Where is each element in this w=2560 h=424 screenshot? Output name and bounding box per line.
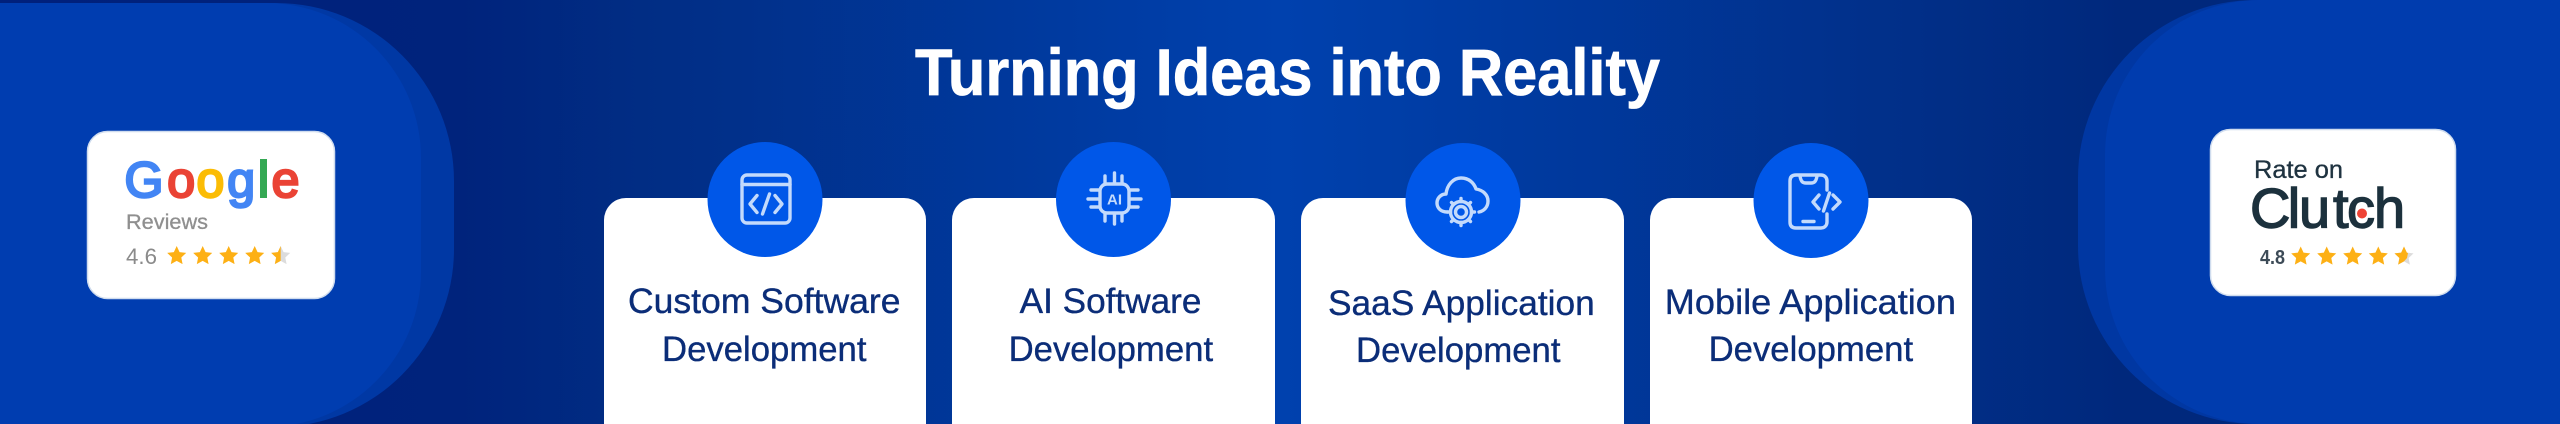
Clutch logo	[2250, 176, 2405, 240]
Reviews label: Reviews	[126, 211, 208, 234]
rating value 4.6: 4.6	[126, 244, 157, 269]
Google logo: o	[196, 152, 224, 208]
Google logo: g	[227, 152, 255, 208]
icon: AI chip: AI	[1107, 192, 1122, 208]
card heading: AI Software	[1020, 282, 1201, 321]
title: Turning Ideas into Reality	[915, 35, 1660, 109]
panel: Clutch rating badge	[2210, 130, 2456, 296]
Clutch logo: t	[2333, 176, 2349, 240]
panel: SaaS Application Development	[1301, 143, 1624, 424]
Clutch logo: c	[2347, 176, 2375, 240]
card heading: SaaS Application	[1328, 284, 1595, 323]
icon: mobile phone with code	[1790, 175, 1840, 228]
card heading: Custom Software	[628, 282, 900, 321]
star rating	[2291, 246, 2414, 265]
Clutch logo: l	[2288, 176, 2300, 240]
Clutch logo: u	[2299, 176, 2330, 240]
Clutch logo: h	[2374, 176, 2405, 240]
Clutch logo: C	[2250, 176, 2290, 240]
panel: Google reviews badge	[88, 132, 334, 298]
Rate on label: Rate on	[2254, 156, 2343, 184]
Google logo	[124, 152, 299, 208]
icon: AI chip	[1088, 173, 1141, 224]
icon circle	[1056, 142, 1171, 257]
rating value 4.8: 4.8	[2260, 247, 2285, 269]
icon circle	[1754, 143, 1868, 258]
icon circle	[708, 142, 822, 257]
panel: right rounded backdrop	[2078, 0, 2560, 424]
card heading: Development	[1709, 330, 1913, 369]
panel: Custom Software Development	[604, 142, 926, 424]
Google logo: o	[167, 152, 195, 208]
icon circle	[1406, 143, 1520, 258]
Google logo: G	[124, 152, 163, 208]
star rating	[167, 246, 290, 264]
panel: left rounded backdrop	[0, 3, 454, 424]
card heading: Development	[1009, 330, 1213, 369]
card heading: Development	[1356, 331, 1561, 370]
icon: code window	[742, 175, 790, 223]
Google logo: e	[272, 152, 299, 208]
panel: AI Software Development	[952, 142, 1275, 424]
panel: Mobile Application Development	[1650, 143, 1972, 424]
card heading: Mobile Application	[1665, 283, 1956, 322]
card heading: Development	[662, 330, 867, 369]
icon: cloud with gear	[1437, 178, 1488, 226]
